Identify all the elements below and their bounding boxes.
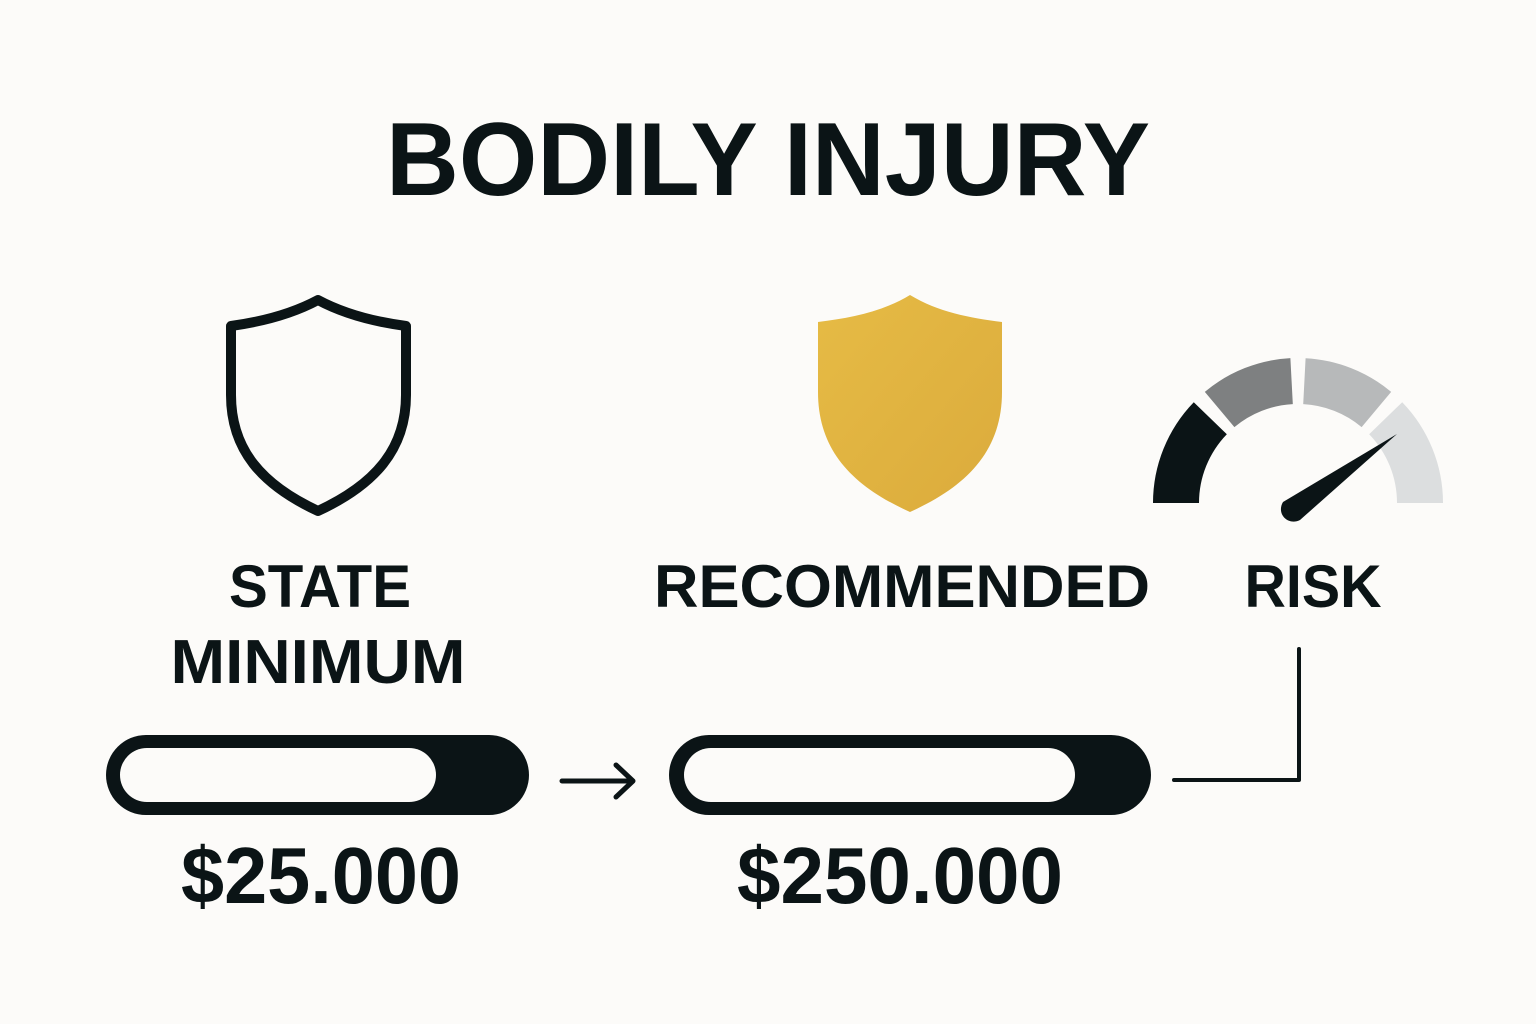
- bar: recommended: [669, 735, 1151, 815]
- label: state minimum: MINIMUM: [170, 628, 466, 697]
- value: $25.000: $25.000: [181, 831, 461, 920]
- label: recommended: RECOMMENDED: [654, 553, 1150, 620]
- icon: outline shield: [231, 300, 406, 511]
- needle: [1281, 434, 1397, 522]
- connector to risk: [1174, 649, 1299, 780]
- title: BODILY INJURY: [386, 102, 1150, 218]
- icon: risk gauge: [1176, 381, 1420, 522]
- bar: state minimum: [106, 735, 529, 815]
- arrow: [562, 765, 633, 797]
- icon: gold shield: [818, 295, 1002, 512]
- value: $250.000: $250.000: [737, 831, 1063, 920]
- label: state minimum: [170, 553, 466, 697]
- label: risk: RISK: [1244, 553, 1382, 620]
- label: state minimum: STATE: [229, 553, 411, 620]
